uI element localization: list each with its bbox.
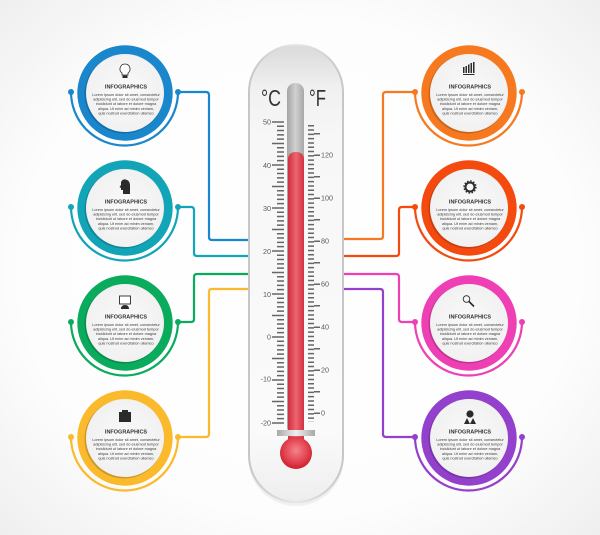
panel: left 4 yellow: quis nostrud exercitation ullamco bbox=[98, 457, 154, 461]
panel: right 1 orange: incididunt ut labore et dolore magna bbox=[440, 102, 501, 106]
panel: right 2 red: aliqua. Ut enim ad minim veniam, bbox=[442, 222, 498, 226]
fahrenheit scale: 40 bbox=[321, 322, 329, 332]
panel: right 2 red: adipisicing elit, sed do eiusmod tempor bbox=[437, 212, 503, 216]
panel: right 3 magenta: adipisicing elit, sed do eiusmod tempor bbox=[437, 328, 503, 332]
panel: right 1 orange: adipisicing elit, sed do eiusmod tempor bbox=[437, 98, 503, 102]
panel: left 2 teal: quis nostrud exercitation ullamco bbox=[98, 227, 154, 231]
celsius scale bbox=[261, 118, 280, 428]
panel: right 1 orange: Lorem ipsum dolor sit amet, consectetur bbox=[436, 93, 504, 97]
panel: left 2 teal: adipisicing elit, sed do eiusmod tempor bbox=[93, 212, 159, 216]
panel: right 3 magenta: Lorem ipsum dolor sit amet, consectetur bbox=[436, 323, 504, 327]
icon: gear bbox=[464, 181, 476, 193]
panel: left 1 blue: INFOGRAPHICS bbox=[105, 84, 147, 90]
panel: right 3 magenta: aliqua. Ut enim ad minim veniam, bbox=[442, 337, 498, 341]
panel: left 2 teal: Lorem ipsum dolor sit amet, consectetur bbox=[92, 208, 160, 212]
celsius scale: 20 bbox=[263, 247, 271, 256]
fahrenheit scale: 20 bbox=[321, 366, 329, 374]
panel: left 2 teal: INFOGRAPHICS bbox=[105, 200, 147, 206]
panel: left 2 teal: incididunt ut labore et dolore magna bbox=[96, 217, 157, 221]
panel: right 2 red: quis nostrud exercitation ullamco bbox=[442, 227, 498, 231]
unit labels: °F bbox=[309, 85, 326, 111]
panel: left 4 yellow: adipisicing elit, sed do eiusmod tempor bbox=[93, 442, 159, 446]
panel: left 4 yellow: incididunt ut labore et dolore magna bbox=[96, 447, 157, 451]
glass tube bbox=[287, 83, 304, 435]
panel: right 1 orange: quis nostrud exercitation ullamco bbox=[442, 112, 498, 116]
icon: people bbox=[464, 410, 476, 424]
panel: left 3 green: adipisicing elit, sed do eiusmod tempor bbox=[93, 328, 159, 332]
panel: right 4 purple: aliqua. Ut enim ad minim veniam, bbox=[442, 452, 498, 456]
celsius scale: -10 bbox=[261, 374, 271, 384]
bulb bbox=[280, 437, 312, 469]
celsius scale: 40 bbox=[263, 161, 271, 170]
panel: right 4 purple: adipisicing elit, sed do eiusmod tempor bbox=[437, 442, 503, 446]
icon: head bbox=[120, 179, 130, 194]
fahrenheit scale: 0 bbox=[321, 408, 325, 418]
panel: left 1 blue: incididunt ut labore et dolore magna bbox=[96, 102, 157, 106]
panel: left 3 green bbox=[68, 275, 181, 376]
fahrenheit scale: 60 bbox=[321, 280, 329, 288]
icon: bar chart bbox=[463, 62, 474, 75]
fahrenheit scale bbox=[311, 125, 333, 422]
panel: right 2 red: incididunt ut labore et dolore magna bbox=[440, 217, 501, 221]
panel: left 1 blue: aliqua. Ut enim ad minim veniam, bbox=[98, 107, 154, 111]
thermometer bbox=[248, 44, 344, 506]
celsius scale: -20 bbox=[261, 418, 271, 428]
panel: left 3 green: incididunt ut labore et dolore magna bbox=[96, 332, 157, 336]
unit labels: °C bbox=[261, 85, 281, 111]
celsius scale: 50 bbox=[263, 118, 271, 126]
panel: right 4 purple: quis nostrud exercitation ullamco bbox=[442, 457, 498, 461]
panel: right 2 red: INFOGRAPHICS bbox=[449, 200, 491, 206]
panel: left 1 blue: Lorem ipsum dolor sit amet, consectetur bbox=[92, 93, 160, 97]
thermometer body bbox=[248, 44, 344, 506]
panel: left 3 green: Lorem ipsum dolor sit amet, consectetur bbox=[92, 323, 160, 327]
fahrenheit scale: 80 bbox=[321, 236, 329, 246]
panel: right 4 purple: incididunt ut labore et dolore magna bbox=[440, 447, 501, 451]
unit labels bbox=[261, 85, 326, 111]
panel: left 1 blue: quis nostrud exercitation ullamco bbox=[98, 112, 154, 116]
panel: right 1 orange bbox=[412, 45, 525, 145]
fahrenheit scale: 120 bbox=[321, 150, 333, 160]
panel: right 3 magenta: quis nostrud exercitation ullamco bbox=[442, 342, 498, 346]
panel: left 4 yellow: INFOGRAPHICS bbox=[105, 430, 147, 436]
celsius scale: 10 bbox=[263, 290, 271, 299]
panel: right 3 magenta: INFOGRAPHICS bbox=[449, 314, 491, 320]
panel: right 3 magenta bbox=[412, 275, 525, 376]
panel: right 3 magenta: incididunt ut labore et dolore magna bbox=[440, 332, 501, 336]
panel: left 3 green: quis nostrud exercitation ullamco bbox=[98, 342, 154, 346]
panel: right 1 orange: aliqua. Ut enim ad minim veniam, bbox=[442, 107, 498, 111]
panel: left 4 yellow bbox=[68, 390, 181, 490]
panel: left 2 teal bbox=[68, 160, 181, 260]
fahrenheit scale: 100 bbox=[321, 194, 333, 202]
mercury column bbox=[288, 152, 304, 442]
panel: left 3 green: INFOGRAPHICS bbox=[105, 314, 147, 320]
panel: right 4 purple: INFOGRAPHICS bbox=[449, 430, 491, 436]
collar bbox=[277, 430, 315, 436]
panel: right 1 orange: INFOGRAPHICS bbox=[449, 84, 491, 90]
panel: left 1 blue: adipisicing elit, sed do eiusmod tempor bbox=[93, 98, 159, 102]
icon: light bulb bbox=[120, 64, 130, 78]
celsius scale: 30 bbox=[263, 204, 271, 213]
panel: right 2 red: Lorem ipsum dolor sit amet, consectetur bbox=[436, 208, 504, 212]
icon: magnifier bbox=[463, 296, 474, 306]
panel: left 3 green: aliqua. Ut enim ad minim veniam, bbox=[98, 337, 154, 341]
panel: right 2 red bbox=[412, 160, 525, 260]
icon: briefcase bbox=[119, 410, 131, 422]
panel: left 4 yellow: Lorem ipsum dolor sit amet, consectetur bbox=[92, 438, 160, 442]
panel: left 1 blue bbox=[68, 45, 181, 145]
panel: right 4 purple bbox=[412, 390, 525, 490]
connector lines bbox=[178, 92, 415, 437]
panel: left 4 yellow: aliqua. Ut enim ad minim veniam, bbox=[98, 452, 154, 456]
celsius scale: 0 bbox=[267, 332, 271, 342]
icon: monitor bbox=[120, 296, 130, 309]
panel: left 2 teal: aliqua. Ut enim ad minim veniam, bbox=[98, 222, 154, 226]
panel: right 4 purple: Lorem ipsum dolor sit amet, consectetur bbox=[436, 438, 504, 442]
